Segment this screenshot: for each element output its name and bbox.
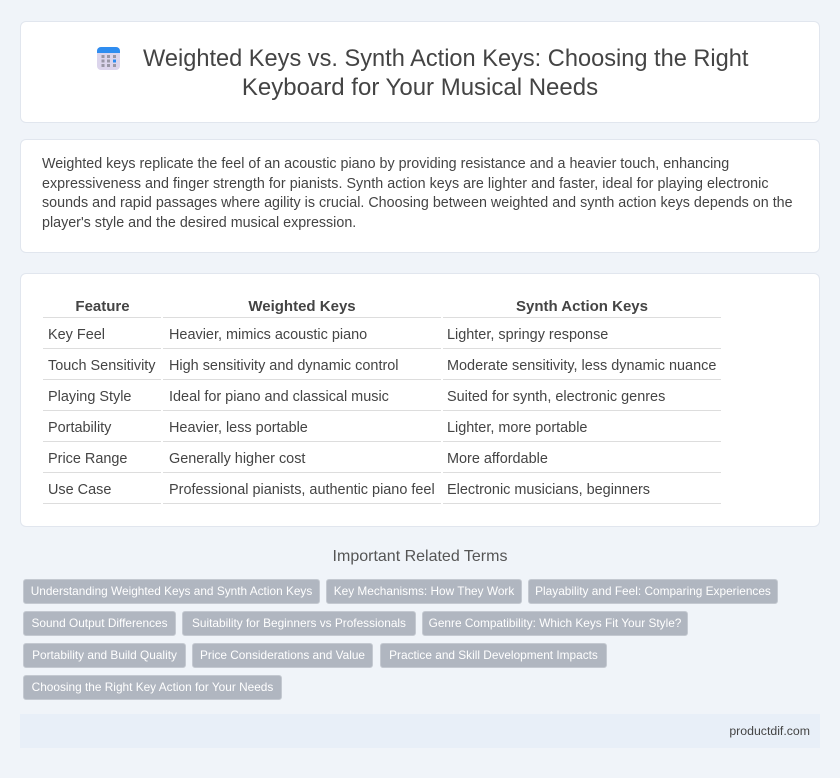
- related terms tags: Key Mechanisms: How They Work: [334, 584, 514, 598]
- related terms tags: Understanding Weighted Keys and Synth Action Keys: [31, 584, 312, 598]
- table: comparison: More affordable: [447, 451, 548, 467]
- panel: comparison table: [20, 273, 820, 527]
- table: comparison: Ideal for piano and classical music: [169, 389, 389, 405]
- related terms tags: Portability and Build Quality: [32, 648, 177, 662]
- table: comparison: Touch Sensitivity: [48, 358, 156, 374]
- table: comparison: Lighter, more portable: [447, 420, 587, 436]
- table: comparison: Generally higher cost: [169, 451, 305, 467]
- related terms tags: Playability and Feel: Comparing Experiences: [535, 584, 771, 598]
- table: comparison: Professional pianists, authentic piano feel: [169, 482, 435, 498]
- related terms tags: Price Considerations and Value: [200, 648, 365, 662]
- heading: important related terms: Important Related Terms: [333, 548, 507, 565]
- title: Keyboard for Your Musical Needs: [242, 74, 598, 101]
- icon: keypad calendar: [97, 47, 120, 70]
- table header: Feature: [75, 298, 130, 315]
- table: comparison: Electronic musicians, beginners: [447, 482, 650, 498]
- text block: introduction: expressiveness and finger strength for pianists. Synth action keys are lighter and faster, ideal for playing electronic: [42, 176, 769, 192]
- table: comparison: Playing Style: [48, 389, 131, 405]
- related terms tags: Genre Compatibility: Which Keys Fit Your Style?: [429, 616, 681, 630]
- title: [143, 46, 748, 101]
- text block: introduction: Weighted keys replicate the feel of an acoustic piano by providing resistance and a heavier touch, enhancing: [42, 156, 729, 172]
- text block: introduction: sounds and rapid passages where agility is crucial. Choosing between weighted and synth action keys depends on the: [42, 195, 793, 211]
- table: comparison: Moderate sensitivity, less dynamic nuance: [447, 358, 716, 374]
- table: comparison: Lighter, springy response: [447, 327, 608, 343]
- table: comparison: Key Feel: [48, 327, 105, 343]
- related terms tags: Sound Output Differences: [31, 616, 168, 630]
- table: comparison: Heavier, mimics acoustic piano: [169, 327, 367, 343]
- table: comparison: Suited for synth, electronic genres: [447, 389, 665, 405]
- table: comparison: Use Case: [48, 482, 111, 498]
- title: Weighted Keys vs. Synth Action Keys: Choosing the Right: [143, 46, 748, 72]
- table: comparison: Synth Action Keys: [516, 298, 648, 315]
- text block: introduction: player's style and the desired musical expression.: [42, 215, 356, 231]
- table: comparison: Portability: [48, 420, 111, 436]
- related terms tags: Suitability for Beginners vs Professionals: [192, 616, 406, 630]
- panel: title header: [20, 21, 820, 123]
- table: comparison: Heavier, less portable: [169, 420, 308, 436]
- related terms tags: [23, 579, 778, 700]
- panel: introduction: [20, 139, 820, 253]
- text block: introduction: [42, 156, 793, 231]
- footer: site name: productdif.com: [729, 724, 810, 738]
- related terms tags: Choosing the Right Key Action for Your Needs: [32, 680, 273, 694]
- related terms tags: Practice and Skill Development Impacts: [389, 648, 598, 662]
- table: comparison: Price Range: [48, 451, 127, 467]
- table: comparison: High sensitivity and dynamic control: [169, 358, 398, 374]
- table: comparison: Weighted Keys: [248, 298, 356, 315]
- footer bar: [20, 714, 820, 748]
